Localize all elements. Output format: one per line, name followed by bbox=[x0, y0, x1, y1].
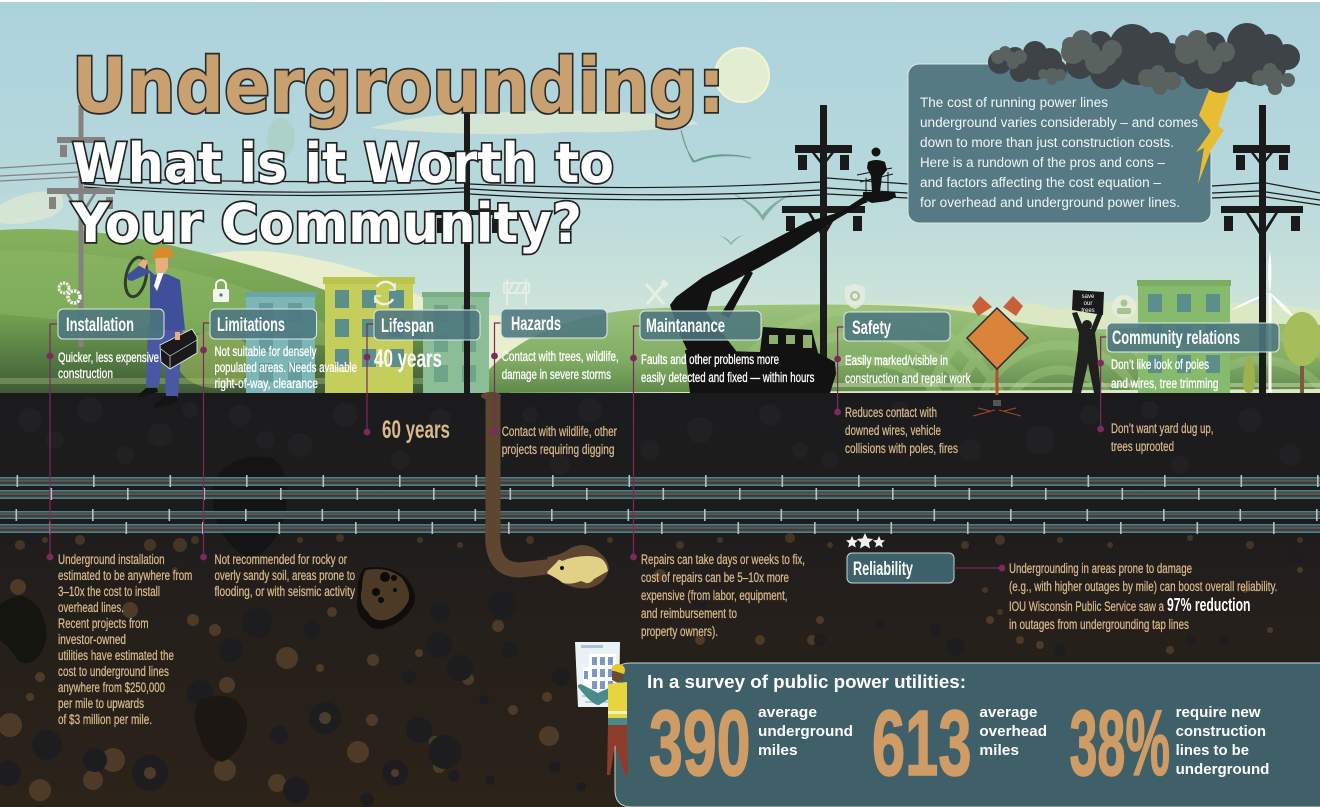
rock: bottom bbox=[194, 696, 247, 762]
burrow and hamster bbox=[481, 392, 609, 588]
underground text: anywhere from $250,000 bbox=[58, 680, 165, 695]
stat: 613 overhead: average bbox=[979, 704, 1037, 721]
boom truck silhouette bbox=[670, 148, 896, 393]
connector bbox=[494, 323, 501, 431]
heading: Installation bbox=[66, 315, 134, 336]
underground text: flooding, or with seismic activity bbox=[214, 584, 355, 599]
protester with sign: save bbox=[1082, 294, 1095, 300]
icon: tools bbox=[646, 281, 667, 304]
overhead text bbox=[1097, 357, 1218, 391]
icon: shield bbox=[845, 284, 865, 309]
overhead text bbox=[491, 349, 619, 382]
heading bbox=[640, 311, 761, 340]
overhead text: construction and repair work bbox=[845, 371, 971, 386]
underground text: investor-owned bbox=[58, 632, 126, 647]
building: right green bbox=[1137, 280, 1231, 393]
pipes bbox=[0, 475, 1320, 534]
heading: Reliability bbox=[853, 559, 913, 580]
pole: centre left bbox=[430, 112, 498, 393]
overhead text bbox=[834, 353, 971, 386]
underground text: estimated to be anywhere from bbox=[58, 568, 192, 583]
connector bbox=[50, 324, 57, 557]
intro text: underground varies considerably – and comes bbox=[920, 115, 1198, 130]
icon: person bbox=[1112, 295, 1136, 319]
trees right bbox=[1243, 312, 1320, 393]
underground text: Reduces contact with bbox=[845, 405, 937, 420]
underground text: property owners). bbox=[641, 624, 718, 639]
panel: community relations bbox=[1097, 295, 1279, 454]
sun bbox=[715, 48, 769, 102]
soil background bbox=[0, 393, 1320, 807]
building: sea green bbox=[422, 292, 490, 393]
subtitle line 1: What is it Worth to bbox=[72, 132, 614, 195]
panel: installation bbox=[47, 283, 192, 727]
underground text: overly sandy soil, areas prone to bbox=[214, 568, 355, 583]
underground text: Not recommended for rocky or bbox=[214, 552, 347, 567]
underground text bbox=[1097, 421, 1214, 454]
panel: safety bbox=[834, 284, 971, 456]
underground text bbox=[200, 552, 355, 599]
underground text bbox=[47, 552, 192, 727]
underground text: Recent projects from bbox=[58, 616, 149, 631]
building: teal bbox=[245, 292, 316, 393]
title: Undergrounding: bbox=[72, 41, 725, 130]
underground text: cost to underground lines bbox=[58, 664, 169, 679]
road sign bbox=[967, 296, 1028, 416]
power lines bbox=[0, 163, 1320, 205]
rocks bbox=[0, 567, 415, 762]
overhead text: Quicker, less expensive bbox=[58, 350, 159, 365]
stat: 613 overhead: miles bbox=[979, 742, 1019, 759]
pole: grey left bbox=[47, 105, 115, 347]
underground text: and reimbursement to bbox=[641, 606, 737, 621]
panel: reliability bbox=[846, 533, 1277, 632]
survey heading: In a survey of public power utilities: bbox=[647, 672, 966, 692]
underground text: Contact with wildlife, other bbox=[502, 424, 617, 439]
panel: survey bbox=[615, 663, 1320, 807]
description: 97% reduction bbox=[1167, 595, 1250, 615]
connector bbox=[634, 326, 640, 557]
overhead text: Easily marked/visible in bbox=[845, 353, 948, 368]
connector bbox=[204, 323, 210, 557]
stat: 613 overhead: 613 bbox=[872, 691, 972, 795]
underground text bbox=[834, 405, 958, 456]
rock: left bbox=[0, 596, 46, 663]
overhead text bbox=[200, 344, 357, 391]
underground text bbox=[630, 552, 805, 639]
worker with plans bbox=[575, 642, 628, 775]
icon: refresh bbox=[375, 282, 395, 304]
intro text: The cost of running power lines bbox=[920, 95, 1108, 110]
stat: 38 percent: 38% bbox=[1070, 691, 1170, 795]
lightning bolt bbox=[1196, 90, 1230, 184]
underground text: Repairs can take days or weeks to fix, bbox=[641, 552, 805, 567]
stat: 38 percent: lines to be bbox=[1176, 742, 1249, 759]
underground text: expensive (from labor, equipment, bbox=[641, 588, 788, 603]
panel: hazards bbox=[491, 279, 619, 457]
heading bbox=[501, 309, 607, 338]
underground text: Don’t want yard dug up, bbox=[1111, 421, 1214, 436]
background: sky bbox=[0, 2, 1320, 394]
underground text: of $3 million per mile. bbox=[58, 712, 152, 727]
briefcase bbox=[160, 329, 197, 369]
overhead text: construction bbox=[58, 366, 113, 381]
description bbox=[999, 561, 1277, 632]
overhead text: Contact with trees, wildlife, bbox=[502, 349, 619, 364]
intro text: and factors affecting the cost equation – bbox=[920, 175, 1161, 190]
heading bbox=[58, 309, 164, 339]
wind turbine bbox=[1230, 251, 1298, 393]
icon: stars bbox=[846, 533, 885, 548]
heading: Hazards bbox=[511, 314, 561, 335]
intro box bbox=[908, 64, 1211, 223]
underground text: 3–10x the cost to install bbox=[58, 584, 160, 599]
icon: barrier bbox=[504, 279, 529, 305]
connector bbox=[838, 327, 844, 412]
heading bbox=[210, 309, 316, 339]
overhead value bbox=[364, 345, 442, 373]
underground text: utilities have estimated the bbox=[58, 648, 174, 663]
heading bbox=[1107, 323, 1279, 352]
stat: 390 underground: miles bbox=[758, 742, 798, 759]
underground text: cost of repairs can be 5–10x more bbox=[641, 570, 789, 585]
underground text bbox=[491, 424, 617, 457]
overhead text: Don’t like look of poles bbox=[1111, 357, 1209, 372]
buildings bbox=[245, 277, 1231, 393]
heading bbox=[847, 553, 954, 583]
underground text: per mile to upwards bbox=[58, 696, 144, 711]
heading bbox=[844, 312, 950, 341]
overhead text: damage in severe storms bbox=[502, 367, 611, 382]
storm cloud bbox=[988, 23, 1300, 95]
intro text: Here is a rundown of the pros and cons – bbox=[920, 155, 1165, 170]
icon: lock bbox=[213, 280, 229, 302]
heading: Community relations bbox=[1112, 328, 1240, 349]
overhead text: Not suitable for densely bbox=[214, 344, 317, 359]
worker in bucket bbox=[857, 148, 896, 203]
landscape: hills and fields bbox=[0, 228, 1320, 393]
stat: 38 percent: require new bbox=[1176, 704, 1261, 721]
overhead text: populated areas. Needs available bbox=[214, 360, 357, 375]
heading: Safety bbox=[852, 318, 891, 339]
intro text: for overhead and underground power lines. bbox=[920, 195, 1180, 210]
soil speckles bbox=[0, 397, 1304, 807]
underground text: projects requiring digging bbox=[502, 442, 614, 457]
panel: maintanance bbox=[630, 281, 815, 639]
underground text: trees uprooted bbox=[1111, 439, 1174, 454]
description: Undergrounding in areas prone to damage bbox=[1009, 561, 1192, 576]
protester with sign bbox=[1072, 290, 1104, 393]
underground value bbox=[364, 416, 450, 444]
background: faint clouds and birds bbox=[0, 110, 792, 245]
overhead text bbox=[47, 350, 159, 381]
icon: gears bbox=[59, 283, 80, 303]
overhead text: right-of-way, clearance bbox=[214, 376, 318, 391]
stat: 38 percent: underground bbox=[1176, 761, 1269, 778]
rock: brown bbox=[357, 567, 415, 629]
underground text: downed wires, vehicle bbox=[845, 423, 941, 438]
underground text: overhead lines. bbox=[58, 600, 124, 615]
overhead text bbox=[630, 352, 815, 385]
panel: lifespan bbox=[364, 282, 480, 444]
stat: 390 underground: 390 bbox=[649, 691, 750, 795]
building: yellow green bbox=[323, 277, 415, 393]
overhead text: easily detected and fixed — within hours bbox=[641, 370, 815, 385]
panel: limitations bbox=[200, 280, 357, 599]
description: IOU Wisconsin Public Service saw a bbox=[1009, 599, 1164, 614]
overhead value: 40 years bbox=[374, 345, 442, 373]
protester with sign: our bbox=[1084, 301, 1092, 307]
stat: 390 underground: average bbox=[758, 704, 817, 721]
overhead text: and wires, tree trimming bbox=[1111, 376, 1218, 391]
underground value: 60 years bbox=[382, 416, 450, 444]
pole: right bbox=[1221, 105, 1303, 393]
connector bbox=[367, 324, 374, 432]
rock: large dark behind pipes bbox=[213, 456, 287, 557]
heading: Lifespan bbox=[381, 316, 434, 337]
description: in outages from undergrounding tap lines bbox=[1009, 617, 1189, 632]
engineer figure bbox=[122, 247, 197, 408]
heading: Maintanance bbox=[646, 316, 725, 337]
connector bbox=[1101, 337, 1107, 429]
stat: 613 overhead: overhead bbox=[979, 723, 1047, 740]
intro text: down to more than just construction costs. bbox=[920, 135, 1174, 150]
pole: centre right bbox=[782, 105, 865, 393]
stat: 38 percent: construction bbox=[1176, 723, 1266, 740]
connector bbox=[954, 567, 1002, 569]
intro text bbox=[920, 95, 1198, 210]
subtitle line 2: Your Community? bbox=[71, 192, 582, 255]
stat: 390 underground: underground bbox=[758, 723, 853, 740]
protester with sign: trees bbox=[1081, 308, 1095, 314]
overhead text: Faults and other problems more bbox=[641, 352, 779, 367]
heading bbox=[374, 310, 480, 340]
heading: Limitations bbox=[217, 315, 285, 336]
title bbox=[71, 41, 725, 255]
underground text: Underground installation bbox=[58, 552, 165, 567]
underground text: collisions with poles, fires bbox=[845, 441, 958, 456]
